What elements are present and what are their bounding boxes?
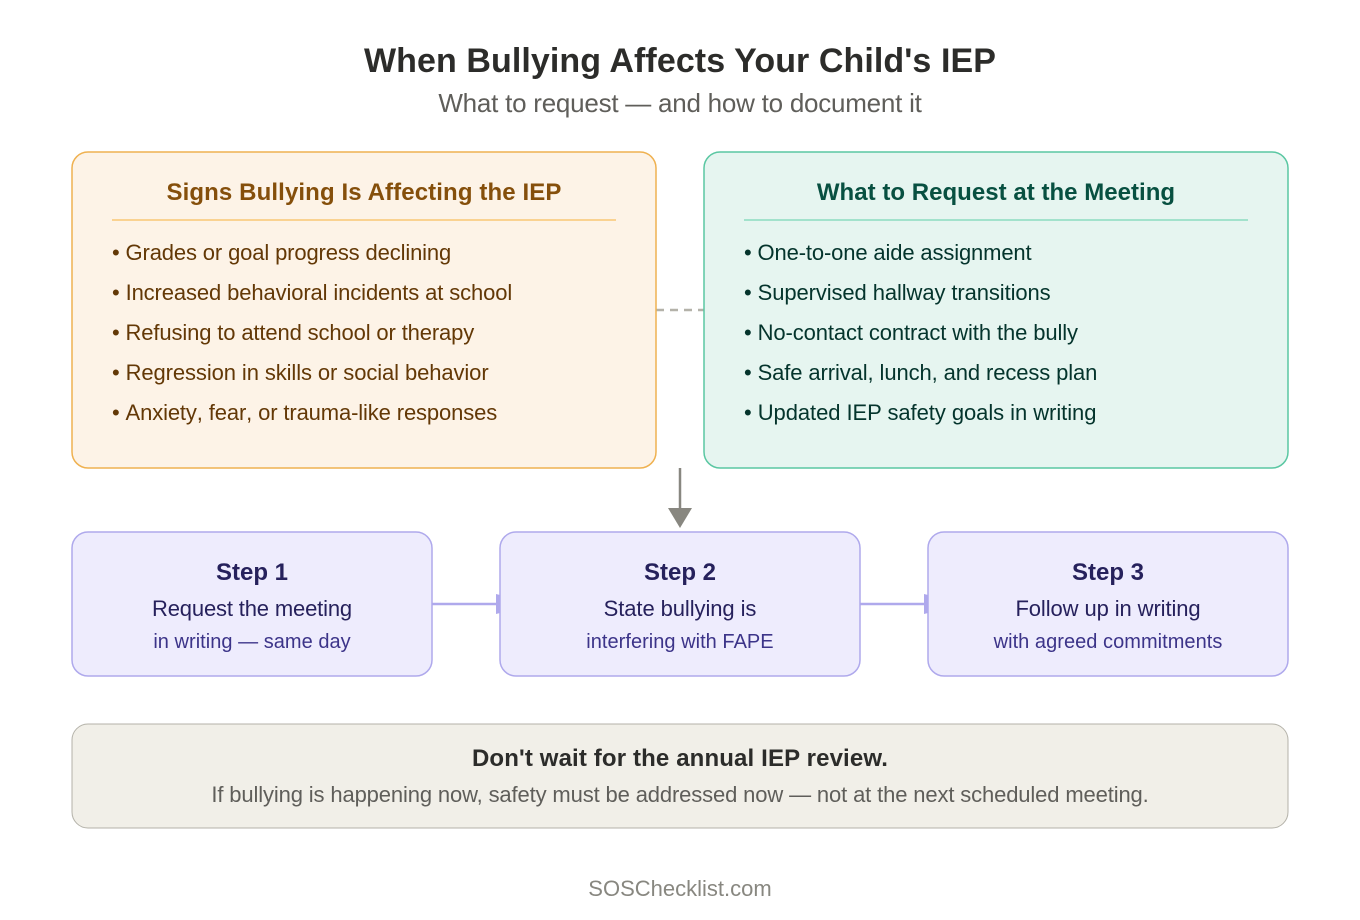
card: step 1 — [71, 531, 433, 677]
panel heading: signs: Signs Bullying Is Affecting the IEP — [166, 179, 562, 206]
list: signs: • Grades or goal progress declining — [112, 240, 451, 265]
panel: what to request at the meeting — [703, 151, 1289, 469]
list: signs: • Anxiety, fear, or trauma-like responses — [112, 400, 497, 425]
card: step 3: with agreed commitments — [994, 631, 1222, 653]
list: requests: • No-contact contract with the bully — [744, 320, 1078, 345]
callout: don't wait: If bullying is happening now, safety must be addressed now — not at the next scheduled meeting. — [211, 782, 1149, 807]
card: step 3: Follow up in writing — [1015, 596, 1201, 621]
card: step 3 — [927, 531, 1289, 677]
card: step 2: Step 2 — [644, 559, 716, 586]
arrow: step 1 to step 2 — [432, 594, 500, 614]
title: When Bullying Affects Your Child's IEP — [364, 42, 996, 80]
card: step 2: interfering with FAPE — [586, 631, 774, 653]
list: signs: • Increased behavioral incidents at school — [112, 280, 512, 305]
connector: dashed link between panels — [656, 308, 704, 312]
card: step 2 — [499, 531, 861, 677]
card: step 2: State bullying is — [604, 596, 756, 621]
list: signs: • Regression in skills or social behavior — [112, 360, 489, 385]
card: step 1: Request the meeting — [152, 596, 352, 621]
list: signs: • Refusing to attend school or therapy — [112, 320, 474, 345]
card: step 1: Step 1 — [216, 559, 288, 586]
arrow: panels down to steps — [668, 468, 692, 528]
callout: don't wait — [72, 724, 1288, 828]
list: requests: • One-to-one aide assignment — [744, 240, 1032, 265]
callout: don't wait: Don't wait for the annual IEP review. — [472, 745, 888, 772]
footer: source: SOSChecklist.com — [588, 876, 772, 901]
card: step 3: Step 3 — [1072, 559, 1144, 586]
subtitle: What to request — and how to document it — [438, 88, 922, 118]
list: signs — [112, 240, 512, 425]
card: step 1: in writing — same day — [153, 631, 351, 653]
list: requests — [744, 240, 1097, 425]
arrow: step 2 to step 3 — [860, 594, 928, 614]
list: requests: • Updated IEP safety goals in writing — [744, 400, 1096, 425]
list: requests: • Safe arrival, lunch, and recess plan — [744, 360, 1097, 385]
panel heading: request: What to Request at the Meeting — [817, 179, 1175, 206]
panel: signs bullying is affecting the IEP — [71, 151, 657, 469]
list: requests: • Supervised hallway transitions — [744, 280, 1051, 305]
